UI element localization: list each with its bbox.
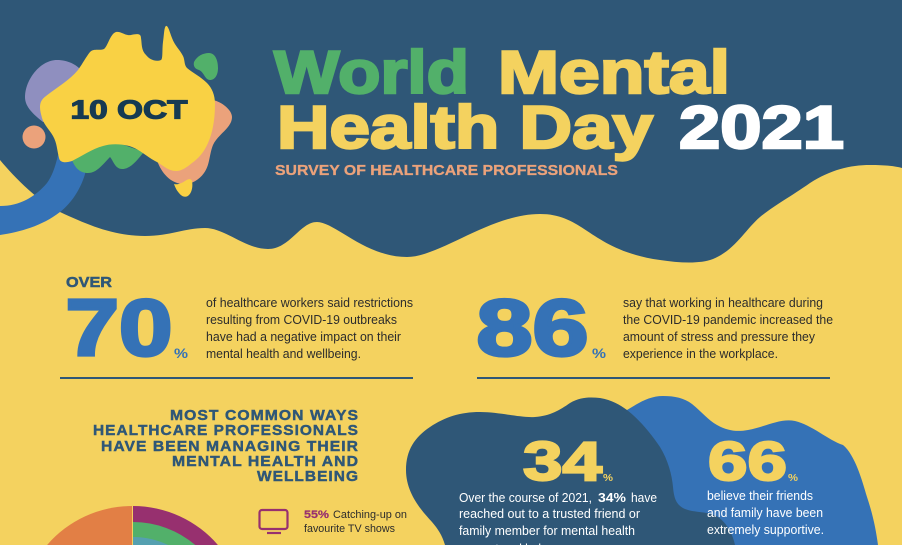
section heading: HEALTHCARE PROFESSIONALS <box>93 422 359 439</box>
over label: OVER <box>66 274 112 291</box>
description: Over the course of 2021, <box>459 490 592 505</box>
percent sign: % <box>788 473 798 484</box>
description: experience in the workplace. <box>623 347 778 361</box>
number 34: 34 <box>523 430 603 492</box>
purple blob <box>25 60 82 122</box>
description: have had a negative impact on their <box>206 330 401 344</box>
icon: television <box>260 510 288 533</box>
section heading: MENTAL HEALTH AND <box>172 453 359 470</box>
percent sign: % <box>592 345 607 361</box>
peach blob <box>158 100 232 184</box>
mainland <box>40 26 215 171</box>
legend text: favourite TV shows <box>304 523 395 535</box>
stat: 86 percent <box>476 283 833 372</box>
stat: 66 percent <box>707 430 824 537</box>
section heading: MOST COMMON WAYS <box>170 407 359 424</box>
description: extremely supportive. <box>707 522 824 537</box>
legend percent: 55% <box>304 509 329 521</box>
date label: 10 OCT <box>70 94 188 124</box>
teal ring <box>133 537 168 545</box>
section heading: WELLBEING <box>257 468 359 485</box>
green ring <box>133 522 195 545</box>
title word: Mental: Mental <box>498 39 730 106</box>
stat: 34 percent <box>459 430 657 545</box>
number 66: 66 <box>708 430 787 492</box>
legend text <box>304 509 407 535</box>
navy blob panel <box>406 398 735 545</box>
description <box>206 296 413 361</box>
description <box>623 296 833 361</box>
title word: World: World <box>274 39 469 106</box>
green islet <box>194 53 218 80</box>
description: amount of stress and pressure they <box>623 330 816 344</box>
number 70: 70 <box>66 283 172 372</box>
description: believe their friends <box>707 488 813 503</box>
title <box>274 39 844 161</box>
description: of healthcare workers said restrictions <box>206 296 413 310</box>
blue band <box>0 155 87 235</box>
percent sign: % <box>603 473 613 484</box>
percent sign: % <box>174 345 189 361</box>
description: say that working in healthcare during <box>623 296 823 310</box>
description: and family have been <box>707 505 823 520</box>
orange slice <box>47 506 132 545</box>
Tasmania <box>174 179 192 197</box>
description: have <box>631 490 657 505</box>
legend text: Catching-up on <box>333 509 407 521</box>
peach dot <box>22 126 46 148</box>
icon: Australia map with date <box>0 26 232 235</box>
description <box>707 488 824 537</box>
description <box>459 490 657 545</box>
description: resulting from COVID-19 outbreaks <box>206 313 397 327</box>
legend: TV shows <box>260 509 407 535</box>
description: family member for mental health <box>459 523 635 538</box>
number 86: 86 <box>476 283 588 372</box>
description: the COVID-19 pandemic increased the <box>623 313 833 327</box>
pie chart <box>47 506 218 545</box>
magenta ring <box>133 506 218 545</box>
subtitle: SURVEY OF HEALTHCARE PROFESSIONALS <box>275 162 618 179</box>
section heading <box>93 407 359 485</box>
blue blob panel <box>627 396 878 545</box>
description: reached out to a trusted friend or <box>459 506 641 521</box>
green blob <box>72 140 144 173</box>
title year: 2021 <box>679 94 844 161</box>
stat: over 70 percent <box>66 274 413 372</box>
title words: Health Day: Health Day <box>277 94 654 161</box>
section heading: HAVE BEEN MANAGING THEIR <box>101 438 359 455</box>
header background wave <box>0 0 902 262</box>
description: mental health and wellbeing. <box>206 347 361 361</box>
description: 34% <box>598 490 627 505</box>
